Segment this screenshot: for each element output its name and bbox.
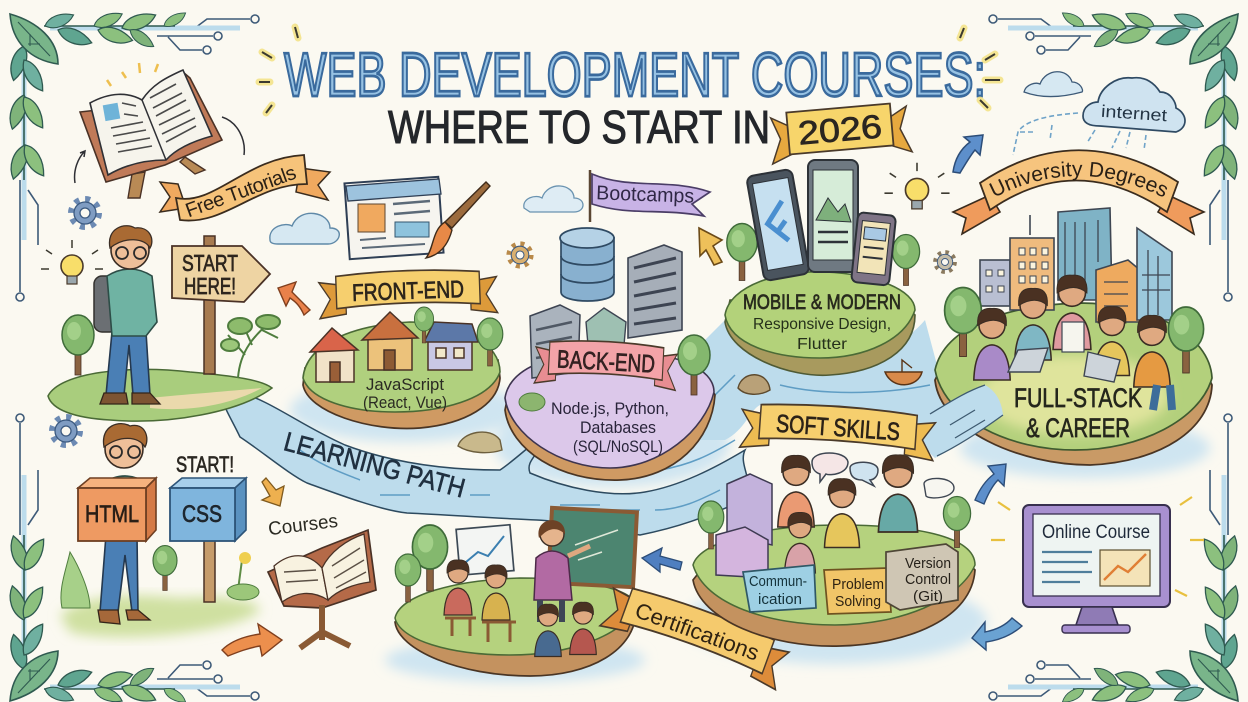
- small cloud top right: [1024, 72, 1083, 96]
- monitor: online course: [991, 497, 1204, 633]
- buildings: [727, 474, 772, 545]
- sign: start here: START: [182, 250, 238, 276]
- river water halos around islands: [290, 378, 1210, 682]
- teacher: [534, 520, 590, 622]
- trees: full-stack island: [945, 288, 1204, 373]
- icon: lightbulb left: [41, 240, 103, 284]
- box: version control: [886, 544, 958, 610]
- label: start: START!: [176, 452, 234, 477]
- island: full-stack and career: [921, 303, 1212, 465]
- browser window and brush: [344, 177, 490, 259]
- title line 2: WHERE TO START IN: [388, 101, 770, 153]
- ribbon: back-end: BACK-END: [556, 345, 656, 379]
- border vine: bottom right: [989, 414, 1243, 702]
- island: mobile and modern: [725, 224, 920, 375]
- arrow: blue up: [953, 135, 983, 173]
- ribbon: certifications: [600, 579, 793, 690]
- border vine: top right: [989, 10, 1243, 301]
- box: HTML: HTML: [85, 501, 139, 528]
- tree and flowers: lower left: [61, 546, 259, 608]
- arrow: blue left to classroom: [642, 548, 682, 572]
- person with backpack: [94, 226, 160, 404]
- island text: JavaScript: [366, 375, 444, 394]
- ribbon: certifications: Certifications: [632, 598, 763, 666]
- island text: FULL-STACK: [1014, 383, 1142, 413]
- ribbon: free tutorials: [160, 155, 330, 222]
- flag: bootcamps: [590, 170, 710, 222]
- box: problem solving: [824, 568, 891, 614]
- monitor: online course: Online Course: [1042, 522, 1150, 543]
- box: version control: Version: [905, 555, 951, 572]
- boat in river: [885, 360, 922, 385]
- title line 1: WEB DEVELOPMENT COURSES:: [284, 41, 986, 110]
- island: front-end: [303, 307, 503, 429]
- sign: start here: HERE!: [184, 273, 236, 299]
- ribbon: free tutorials: Free Tutorials: [183, 162, 299, 222]
- sparkle centres: [259, 27, 1000, 113]
- stream banks: [930, 385, 1003, 456]
- island text: Node.js, Python,: [551, 399, 669, 418]
- ribbon: front-end: FRONT-END: [352, 276, 464, 307]
- box: HTML: [78, 478, 156, 541]
- speech bubbles: [812, 453, 848, 482]
- box: CSS: CSS: [182, 501, 222, 528]
- river: learning path: [222, 315, 1003, 535]
- year banner: [768, 102, 912, 164]
- person with html box: [98, 424, 150, 624]
- ribbon: university degrees: University Degrees: [989, 161, 1168, 196]
- box: problem solving: Solving: [835, 593, 881, 610]
- ribbon: university degrees: [951, 149, 1206, 236]
- start island: [48, 369, 272, 421]
- box: communication: [743, 565, 816, 612]
- arrow: orange to courses: [262, 478, 284, 506]
- box: version control: Control: [905, 571, 951, 588]
- server rack: [628, 245, 682, 338]
- city skyline: [980, 208, 1172, 322]
- database stack: [560, 228, 614, 301]
- icon: gear center: [509, 244, 531, 266]
- people in discussion: [778, 455, 814, 527]
- island: mobile and modern: Flutter: [797, 336, 848, 353]
- title: [259, 27, 1000, 164]
- icon: gear left top: [71, 199, 99, 227]
- box: problem solving: Problem: [832, 576, 884, 593]
- island: certifications classroom: [395, 508, 637, 676]
- island: back-end: [505, 305, 715, 480]
- open book: free tutorials: [75, 63, 244, 198]
- learning path label: LEARNING PATH: [281, 426, 468, 504]
- cloud: internet: internet: [1101, 102, 1168, 125]
- rock in river: [458, 432, 502, 453]
- buildings: [530, 305, 580, 378]
- sign post: start: [176, 452, 234, 602]
- river stream over island: [921, 385, 1003, 458]
- border vine: bottom left: [5, 414, 259, 702]
- houses: [310, 312, 478, 382]
- icon: lightbulb right: [884, 163, 950, 209]
- sparkle rays: [259, 27, 1000, 113]
- island: front-end: (React, Vue): [363, 393, 447, 412]
- ribbon: soft skills: [740, 400, 936, 461]
- island: mobile and modern: Responsive Design,: [753, 316, 891, 333]
- team of people: & CAREER: [1026, 413, 1130, 443]
- lower start ground: [60, 595, 260, 637]
- ribbon: back-end: [534, 338, 678, 390]
- box: communication: ication: [758, 591, 802, 608]
- cloud: internet: [1013, 78, 1185, 155]
- cloud near front-end: [270, 213, 339, 244]
- sign: start here: [172, 236, 270, 374]
- label: courses: Courses: [267, 511, 339, 540]
- team of people: [974, 275, 1172, 443]
- arrow: blue to soft skills: [972, 618, 1022, 650]
- arrow: orange to front-end: [278, 282, 310, 315]
- open book: courses: [268, 530, 376, 648]
- year banner: 2026: [797, 107, 883, 152]
- plant: start island right: [221, 315, 280, 378]
- students: [444, 560, 472, 615]
- border vine: top left: [5, 10, 259, 301]
- box: version control: (Git): [913, 588, 943, 605]
- gears small: [935, 252, 955, 272]
- chalkboard: [548, 508, 637, 587]
- ribbon: front-end: [318, 267, 498, 319]
- rocks in river: [738, 375, 770, 394]
- box: CSS: [170, 478, 246, 541]
- ribbon: soft skills: SOFT SKILLS: [775, 410, 901, 446]
- icon: gear lower left: [52, 417, 80, 445]
- island text: MOBILE & MODERN: [743, 291, 901, 314]
- island: back-end: (SQL/NoSQL): [573, 437, 663, 456]
- cloud near bootcamps: [524, 186, 583, 212]
- cursor arrow: [699, 228, 722, 265]
- chart board: [456, 525, 514, 575]
- arrow: blue to full-stack: [975, 464, 1006, 504]
- tree: start island left: [62, 315, 94, 375]
- island: soft skills: [693, 453, 975, 646]
- phones: [746, 160, 896, 286]
- island: back-end: Databases: [580, 418, 656, 437]
- flag: bootcamps: Bootcamps: [596, 182, 695, 208]
- arrow: orange lower: [222, 624, 282, 656]
- box: communication: Commun-: [749, 573, 807, 590]
